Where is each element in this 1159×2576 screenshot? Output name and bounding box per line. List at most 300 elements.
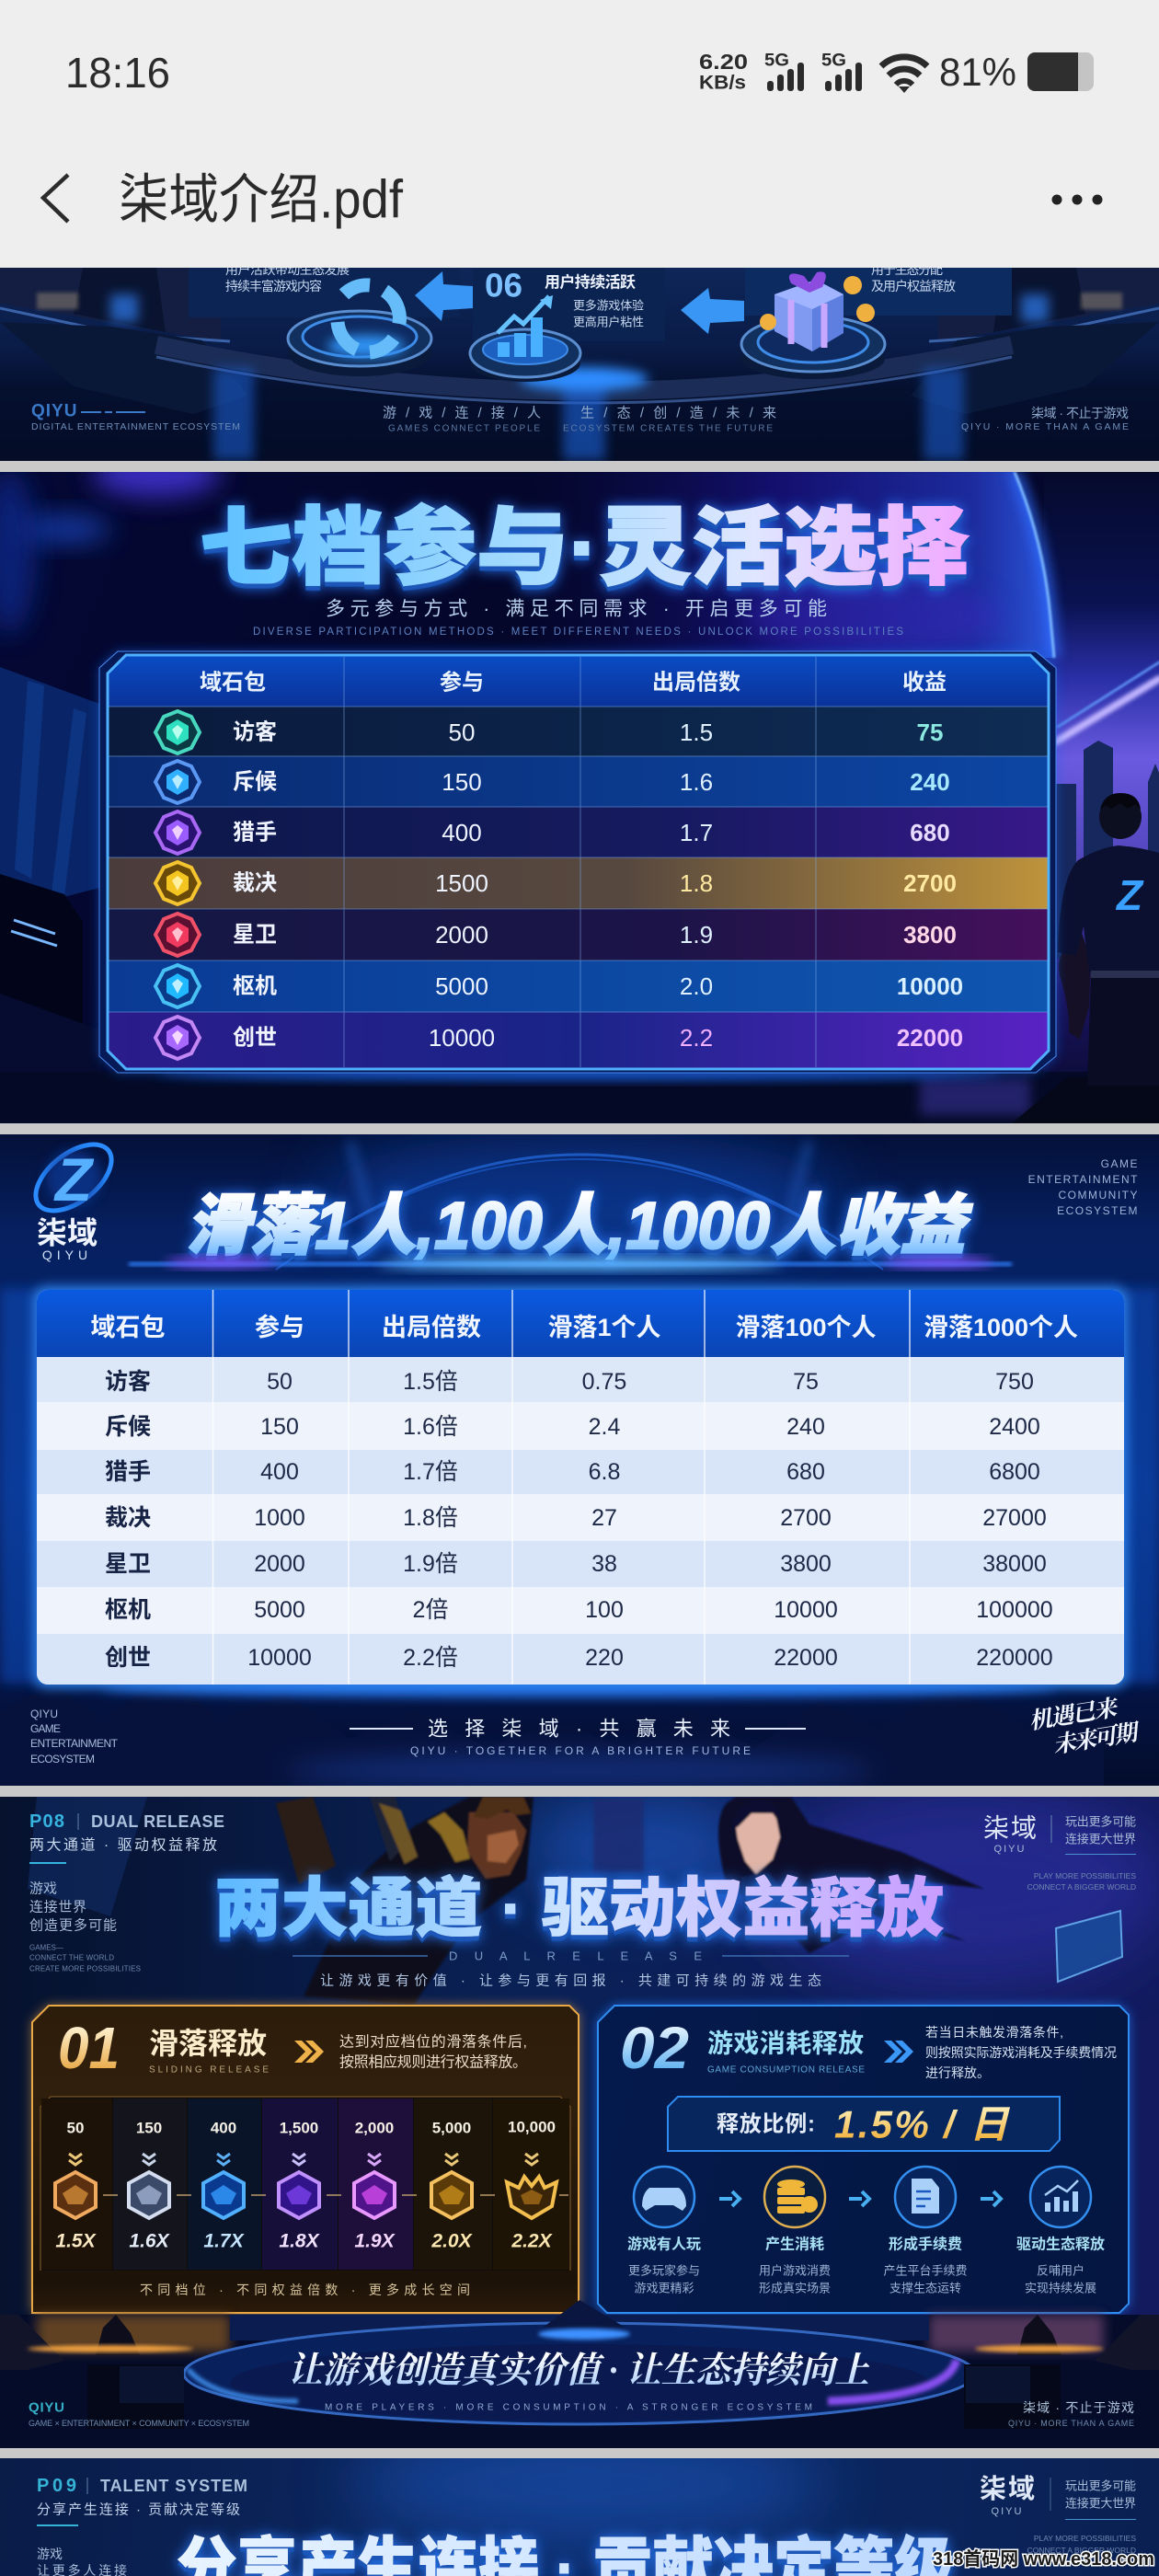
- logo: Z: [53, 1145, 95, 1213]
- card 06: 更多游戏体验: [573, 298, 644, 313]
- panel: consumption release: [598, 2006, 1129, 2313]
- ratio box: [668, 2097, 1060, 2151]
- panel: dual release: [0, 1797, 1159, 2448]
- column: income: 22000: [897, 1024, 963, 1052]
- column: tier: 斥候: [105, 1414, 151, 1440]
- floating card decor: [1056, 1911, 1122, 1982]
- tier multipliers: 2.2X: [511, 2230, 554, 2252]
- column: slide 1: 38: [591, 1551, 617, 1577]
- header left: P09: [37, 2476, 76, 2496]
- column: multiplier: 1.9: [680, 921, 713, 949]
- pedestal left with cycle icon: [288, 285, 431, 376]
- table rows: [108, 655, 1049, 1069]
- arrow: [719, 2191, 740, 2206]
- heading: 游戏消耗释放: [707, 2030, 864, 2057]
- medal magenta: [354, 2172, 395, 2218]
- footer centre: GAMES CONNECT PEOPLE: [388, 423, 540, 434]
- brand top right: QIYU: [992, 2506, 1023, 2517]
- bottom slogan: QIYU · TOGETHER FOR A BRIGHTER FUTURE: [410, 1744, 751, 1757]
- column: slide 1000: [976, 1369, 1053, 1671]
- column: multiplier: 1.8倍: [403, 1505, 458, 1531]
- gem: scout: [155, 761, 200, 803]
- footer left: GAME × ENTERTAINMENT × COMMUNITY × ECOSYSTEM: [29, 2419, 249, 2428]
- tier values: 50: [67, 2120, 84, 2136]
- column: slide 1000: 6800: [989, 1459, 1040, 1485]
- step: consumption: [759, 2167, 831, 2294]
- footer right: [961, 406, 1129, 432]
- top right tagline: COMMUNITY: [1058, 1189, 1139, 1202]
- column: slide 100: 10000: [774, 1597, 838, 1623]
- mountains: [0, 1674, 1104, 1788]
- column: multiplier: 1.6: [680, 768, 713, 796]
- column: income: 240: [910, 768, 950, 796]
- tier values: 400: [211, 2120, 236, 2136]
- battery percent: 81%: [939, 51, 1016, 95]
- left tagline: 连接世界: [29, 1899, 86, 1915]
- left tagline: CONNECT THE WORLD: [29, 1954, 114, 1961]
- tier multipliers: [55, 2230, 554, 2252]
- table header: 滑落100个人: [735, 1314, 877, 1341]
- column: multiplier: 1.7: [680, 819, 713, 846]
- column: multiplier: 1.6倍: [403, 1414, 458, 1440]
- panel: talent system: [0, 2458, 1159, 2576]
- watermark: 318首码网 www.e318.com: [933, 2548, 1154, 2570]
- column: slide 100: 3800: [780, 1551, 832, 1577]
- card 06: 更高用户粘性: [573, 315, 644, 329]
- column: tier: 星卫: [105, 1551, 151, 1577]
- table body rows: [37, 1290, 1124, 1685]
- tier multipliers: 2.0X: [430, 2230, 474, 2252]
- status bar: [65, 49, 1094, 97]
- left tagline: [37, 2547, 127, 2576]
- icon: battery: [1027, 52, 1094, 91]
- sky right: [1044, 472, 1159, 1123]
- column: participate: [429, 719, 495, 1052]
- column: participate: 5000: [254, 1597, 305, 1623]
- column: multiplier: 1.5倍: [403, 1369, 458, 1395]
- brand top right: CONNECT A BIGGER WORLD: [1027, 1882, 1136, 1892]
- tier names: 裁决: [233, 870, 277, 896]
- side card right: 用于生态分配: [871, 262, 943, 277]
- footer right: 柒域 · 不止于游戏: [1023, 2400, 1134, 2415]
- logo: [24, 1132, 123, 1262]
- column: multiplier: [680, 719, 713, 1052]
- tier values: 10,000: [508, 2118, 556, 2136]
- calligraphy motto: [1027, 1695, 1142, 1758]
- step: players: 游戏有人玩: [627, 2236, 701, 2252]
- table header: [108, 655, 1049, 707]
- column: multiplier: 2.2倍: [403, 1645, 458, 1671]
- icon: 5G signal 1: [764, 52, 804, 91]
- header labels: [200, 670, 947, 696]
- left tagline: CREATE MORE POSSIBILITIES: [29, 1965, 141, 1972]
- column: income: 10000: [897, 972, 963, 1000]
- calligraphy motto: 未来可期: [1051, 1719, 1142, 1758]
- icon: 5G signal 2: [821, 52, 862, 91]
- step: release: 反哺用户: [1037, 2263, 1084, 2278]
- column: participate: 50: [449, 719, 475, 746]
- column: slide 1: 0.75: [582, 1369, 626, 1395]
- column: slide 1: 6.8: [589, 1459, 620, 1485]
- column: slide 100: 22000: [774, 1645, 838, 1671]
- page gap 2: [0, 1123, 1159, 1134]
- step: consumption: 用户游戏消费: [759, 2263, 831, 2278]
- dome and beams: [276, 1132, 883, 1270]
- bottom landscape: [0, 2300, 1159, 2448]
- bottom left tagline: GAME: [30, 1722, 61, 1735]
- table header: 参与: [255, 1314, 304, 1341]
- top right tagline: ECOSYSTEM: [1057, 1204, 1139, 1217]
- gem: genesis: [155, 1017, 200, 1059]
- calligraphy motto: 机遇已来: [1027, 1695, 1121, 1734]
- medal silver: [129, 2172, 169, 2218]
- panel: seven tier participation: [0, 472, 1159, 1123]
- card 06: 用户持续活跃: [545, 272, 636, 291]
- column: slide 1: 2.4: [589, 1414, 620, 1440]
- gem: visitor: [155, 711, 200, 753]
- background light: [28, 1785, 1159, 1987]
- header left: 两大通道 · 驱动权益释放: [29, 1836, 217, 1853]
- bottom left tagline: [30, 1708, 119, 1765]
- side glows: [0, 1288, 1159, 1684]
- footer centre: ECOSYSTEM CREATES THE FUTURE: [563, 423, 773, 434]
- tier multipliers: 1.9X: [354, 2230, 396, 2252]
- column: tier: 访客: [105, 1368, 151, 1395]
- title: 滑落1人,100人,1000人收益: [185, 1190, 973, 1263]
- column: slide 1: 100: [585, 1597, 624, 1623]
- number 02: 02: [620, 2015, 689, 2081]
- floor reflection: [0, 1067, 1159, 1123]
- column: multiplier: 1.5: [680, 719, 713, 746]
- column: participate: 150: [442, 768, 482, 796]
- logo: 柒域: [37, 1216, 98, 1249]
- tier names: 斥候: [233, 769, 277, 795]
- heading: 滑落释放: [149, 2027, 267, 2060]
- tier names: 访客: [233, 719, 277, 745]
- footer centre: 生 / 态 / 创 / 造 / 未 / 来: [580, 405, 776, 421]
- step: players: 游戏更精彩: [634, 2282, 694, 2294]
- light streaks: [1053, 662, 1159, 743]
- step: consumption: 形成真实场景: [759, 2282, 831, 2294]
- step: players: 更多玩家参与: [628, 2263, 700, 2278]
- medal blue: [203, 2172, 244, 2218]
- column: slide 1000: 750: [995, 1369, 1034, 1395]
- step: fee: [883, 2167, 968, 2294]
- left tagline: GAMES—: [29, 1943, 63, 1952]
- table: tiers: [99, 651, 1056, 1073]
- footer left: [29, 2399, 249, 2428]
- header left: [37, 2476, 247, 2526]
- column: participate: 50: [267, 1369, 293, 1395]
- footer left: DIGITAL ENTERTAINMENT ECOSYSTEM: [31, 421, 240, 432]
- skyline: [1050, 741, 1159, 959]
- step: release: 驱动生态释放: [1016, 2236, 1105, 2252]
- column: income: 75: [917, 719, 943, 746]
- icon: chevrons: [294, 2041, 324, 2063]
- left tagline: [29, 1880, 141, 1972]
- column: slide 100: 680: [786, 1459, 825, 1485]
- gem: star guard: [155, 914, 200, 956]
- column: participate: 10000: [429, 1024, 495, 1052]
- side card left: 用户活跃带动生态发展: [225, 262, 350, 277]
- column: participate: 150: [260, 1414, 299, 1440]
- icon: chevrons: [884, 2041, 913, 2063]
- column: multiplier: 2倍: [413, 1597, 448, 1623]
- medal gold: [431, 2172, 472, 2218]
- column: slide 1000: 100000: [976, 1597, 1053, 1623]
- brand top right: 玩出更多可能: [1065, 1814, 1136, 1829]
- footer centre: [383, 405, 776, 434]
- table header: [37, 1290, 1124, 1357]
- table header: 域石包: [90, 1314, 166, 1341]
- network speed: KB/s: [699, 72, 746, 94]
- character silhouette: Z: [1115, 871, 1144, 919]
- column: income: 3800: [903, 921, 957, 949]
- column: slide 1: 27: [591, 1505, 617, 1531]
- column: multiplier: [403, 1369, 458, 1671]
- column: slide 1000: 220000: [976, 1645, 1053, 1671]
- heading: SLIDING RELEASE: [149, 2064, 269, 2076]
- table: slide income: [33, 1286, 1128, 1688]
- icon: wifi: [881, 57, 927, 93]
- light beams: [213, 367, 964, 460]
- clock: 18:16: [65, 49, 170, 97]
- top right tagline: ENTERTAINMENT: [1028, 1173, 1139, 1186]
- panel: sliding release: [32, 2006, 579, 2313]
- column: participate: 2000: [435, 921, 488, 949]
- heading: [149, 2027, 269, 2076]
- column: slide 1000: 27000: [982, 1505, 1047, 1531]
- slogan: 让游戏创造真实价值 · 让生态持续向上: [288, 2352, 870, 2390]
- footer note: 不同档位 · 不同权益倍数 · 更多成长空间: [140, 2283, 470, 2297]
- tier values: [67, 2118, 556, 2136]
- number 01: 01: [58, 2015, 120, 2081]
- slogan en: MORE PLAYERS · MORE CONSUMPTION · A STRONGER ECOSYSTEM: [325, 2403, 812, 2412]
- header labels: 域石包: [200, 670, 266, 696]
- planet: [515, 472, 1054, 658]
- description: 进行释放。: [925, 2065, 990, 2080]
- network speed: [699, 50, 748, 94]
- bottom slogan: 选 择 柒 域 · 共 赢 未 来: [428, 1717, 730, 1741]
- city left: [0, 268, 248, 414]
- column: slide 100: 240: [786, 1414, 825, 1440]
- bottom left tagline: ECOSYSTEM: [30, 1753, 95, 1765]
- left tagline: 游戏: [29, 1880, 57, 1897]
- tier names: 创世: [233, 1025, 277, 1051]
- icon: back chevron: [43, 175, 68, 222]
- tier multipliers: 1.7X: [203, 2230, 246, 2252]
- side card left: [189, 262, 460, 317]
- footer left: QIYU: [31, 401, 77, 421]
- curved platform: [156, 345, 1012, 403]
- column: multiplier: 1.9倍: [403, 1551, 458, 1577]
- tier names: 猎手: [233, 821, 277, 845]
- city right: [911, 268, 1159, 414]
- brand top right: 柒域: [980, 2474, 1035, 2504]
- icon: 5G signal 1: 5G: [764, 52, 789, 70]
- gem: pivot: [155, 965, 200, 1007]
- panel: ecosystem slide end: [0, 262, 1159, 461]
- document title: 柒域介绍.pdf: [119, 169, 404, 230]
- tier values: 5,000: [432, 2120, 471, 2136]
- pedestal right with gift box: [741, 271, 885, 379]
- tier strip: [40, 2097, 570, 2271]
- column: slide 1000: 2400: [989, 1414, 1040, 1440]
- footer left: [31, 401, 240, 432]
- subtitle en: D U A L R E L E A S E: [449, 1949, 702, 1963]
- column: slide 100: 2700: [780, 1505, 832, 1531]
- footer centre: 游 / 戏 / 连 / 接 / 人: [383, 405, 541, 421]
- page gap 4: [0, 2448, 1159, 2458]
- column: multiplier: 2.0: [680, 972, 713, 1000]
- footer left: QIYU: [29, 2399, 64, 2416]
- step: consumption: 产生消耗: [765, 2236, 824, 2252]
- column: tier: 创世: [105, 1645, 151, 1671]
- step: release: 实现持续发展: [1025, 2282, 1096, 2294]
- column: tier: [105, 1368, 151, 1671]
- nav bar: [43, 169, 1102, 230]
- network speed: 6.20: [699, 50, 748, 74]
- tier multipliers: 1.5X: [55, 2230, 98, 2252]
- description: 若当日未触发滑落条件,: [925, 2025, 1063, 2040]
- heading: [707, 2030, 865, 2076]
- step: fee: 产生平台手续费: [883, 2263, 968, 2278]
- description: [925, 2025, 1117, 2080]
- column: tier: 枢机: [105, 1597, 151, 1623]
- column: slide 1000: 38000: [982, 1551, 1047, 1577]
- top right tagline: [1028, 1157, 1139, 1217]
- column: slide 100: 75: [793, 1369, 819, 1395]
- connector arrows: [103, 2194, 568, 2196]
- brand top right: PLAY MORE POSSIBILITIES: [1034, 2534, 1136, 2543]
- character silhouette: [1012, 793, 1159, 1123]
- page gap 3: [0, 1786, 1159, 1797]
- description: [339, 2033, 527, 2070]
- step: fee: 支撑生态运转: [889, 2282, 961, 2294]
- brand top right: CONNECT A BIGGER WORLD: [1027, 2546, 1136, 2555]
- column: income: 680: [910, 819, 950, 846]
- background light: [350, 2429, 828, 2539]
- header labels: 出局倍数: [652, 670, 740, 696]
- table header: 滑落1个人: [547, 1314, 661, 1341]
- column: income: [897, 719, 963, 1052]
- header labels: 参与: [440, 670, 484, 696]
- step: players: [627, 2167, 701, 2294]
- column: slide 1: 220: [585, 1645, 624, 1671]
- gem: judge: [155, 862, 200, 904]
- panel: slide income table: [0, 1134, 1159, 1786]
- card 06: [473, 262, 665, 341]
- logo: QIYU: [42, 1248, 92, 1262]
- step: fee: 形成手续费: [889, 2236, 962, 2252]
- bottom slogan: [350, 1717, 806, 1757]
- machine and building left: [0, 667, 101, 1086]
- tier names: [233, 719, 277, 1051]
- side card right: [745, 262, 1012, 316]
- footer right: 柒域 · 不止于游戏: [1031, 406, 1129, 420]
- ratio box: 1.5% / 日: [834, 2103, 1011, 2145]
- top right tagline: GAME: [1101, 1157, 1139, 1170]
- medal bronze: [55, 2172, 96, 2218]
- description: 达到对应档位的滑落条件后,: [339, 2033, 527, 2050]
- side card right: 及用户权益释放: [871, 279, 956, 293]
- arrow: [849, 2191, 869, 2206]
- column: participate: 1000: [254, 1505, 305, 1531]
- column: participate: 5000: [435, 972, 488, 1000]
- subtitle cn: 多元参与方式 · 满足不同需求 · 开启更多可能: [326, 598, 827, 620]
- footer right: QIYU · MORE THAN A GAME: [1008, 2419, 1134, 2428]
- icon: more dots: [1052, 195, 1102, 204]
- tier values: 1,500: [280, 2120, 318, 2136]
- brand top right: 连接更大世界: [1065, 1833, 1136, 1846]
- header left: DUAL RELEASE: [91, 1812, 224, 1831]
- description: 按照相应规则进行权益释放。: [339, 2053, 527, 2070]
- column: multiplier: 1.7倍: [403, 1459, 458, 1485]
- column: participate: 1500: [435, 869, 488, 897]
- subtitle cn: 让游戏更有价值 · 让参与更有回报 · 共建可持续的游戏生态: [320, 1972, 821, 1989]
- column: participate: 2000: [254, 1551, 305, 1577]
- footer right: QIYU · MORE THAN A GAME: [961, 421, 1129, 432]
- column: participate: 10000: [247, 1645, 312, 1671]
- warrior character: [276, 1797, 534, 2005]
- ratio box: 释放比例:: [717, 2112, 815, 2136]
- description: 则按照实际游戏消耗及手续费情况: [925, 2045, 1117, 2060]
- tier chevrons: [69, 2154, 538, 2165]
- tier multipliers: 1.8X: [279, 2230, 321, 2252]
- footer right: [1008, 2400, 1134, 2428]
- header left: [29, 1811, 224, 1864]
- page gap 1: [0, 461, 1159, 472]
- column: tier: 裁决: [105, 1505, 151, 1531]
- header labels: 收益: [902, 670, 947, 696]
- table header: 出局倍数: [382, 1314, 481, 1341]
- brand top right: 连接更大世界: [1065, 2497, 1136, 2510]
- brand top right: [983, 1814, 1136, 1892]
- column: participate: [247, 1369, 312, 1671]
- heading: GAME CONSUMPTION RELEASE: [707, 2064, 865, 2076]
- bottom left tagline: ENTERTAINMENT: [30, 1737, 119, 1750]
- brand top right: QIYU: [994, 1844, 1026, 1855]
- column: income: 2700: [903, 869, 957, 897]
- title underline glow: [129, 1258, 1012, 1270]
- title: 七档参与·灵活选择: [200, 501, 969, 595]
- left tagline: 创造更多可能: [29, 1917, 117, 1934]
- header left: P08: [29, 1811, 64, 1832]
- tier values: 150: [136, 2120, 162, 2136]
- column: participate: 400: [260, 1459, 299, 1485]
- step: release: [1016, 2167, 1105, 2294]
- girl character: [718, 1797, 984, 1953]
- header left: 分享产生连接 · 贡献决定等级: [37, 2501, 240, 2517]
- medal crown: [507, 2177, 557, 2218]
- tier names: 枢机: [233, 973, 277, 999]
- tier multipliers: 1.6X: [129, 2230, 171, 2252]
- title: 两大通道 · 驱动权益释放: [214, 1872, 944, 1944]
- medal violet: [279, 2172, 319, 2218]
- column: participate: 400: [442, 819, 482, 846]
- arrow: [981, 2191, 1001, 2206]
- brand top right: PLAY MORE POSSIBILITIES: [1034, 1871, 1136, 1880]
- subtitle en: DIVERSE PARTICIPATION METHODS · MEET DIFFERENT NEEDS · UNLOCK MORE POSSIBILITIES: [253, 627, 903, 638]
- app chrome background: [0, 0, 1159, 268]
- pedestal centre with growth chart: [470, 295, 580, 382]
- bottom left tagline: QIYU: [30, 1708, 58, 1720]
- arrow 2: [681, 288, 744, 334]
- column: tier: 猎手: [105, 1459, 151, 1485]
- gem: hunter: [155, 811, 200, 854]
- left tagline: 游戏: [37, 2547, 63, 2561]
- arrow 1: [415, 271, 473, 321]
